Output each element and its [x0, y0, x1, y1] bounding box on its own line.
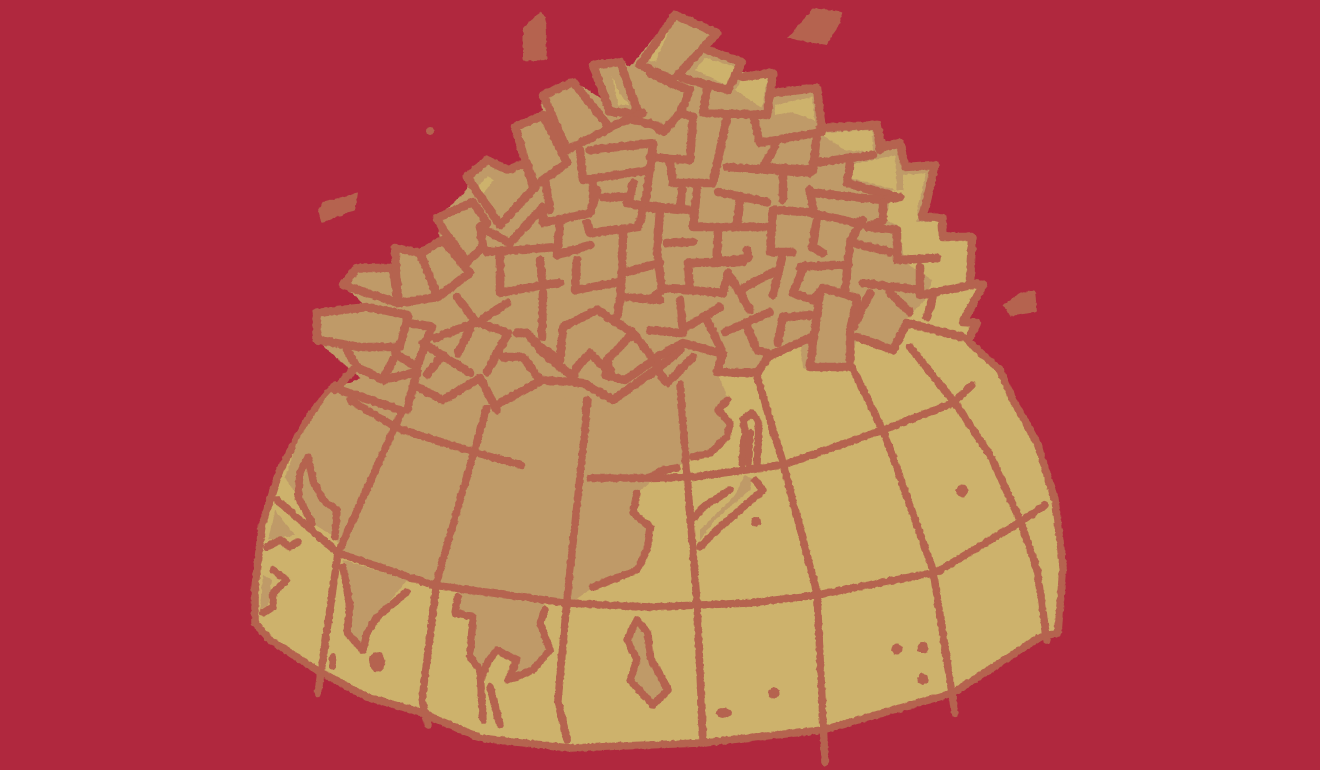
land masses in tan	[260, 340, 815, 705]
pile base fill	[317, 15, 983, 410]
paper outlines	[317, 15, 983, 412]
globe outline	[255, 343, 1063, 748]
lighter yellow paper patches	[474, 25, 978, 340]
graticule lines	[277, 347, 1047, 763]
floating paper scraps	[318, 8, 1037, 316]
globe body fill	[255, 320, 1063, 748]
small islands	[329, 485, 968, 718]
coastlines and islands	[263, 400, 763, 725]
globe	[255, 320, 1063, 763]
pile of papers	[317, 15, 983, 412]
